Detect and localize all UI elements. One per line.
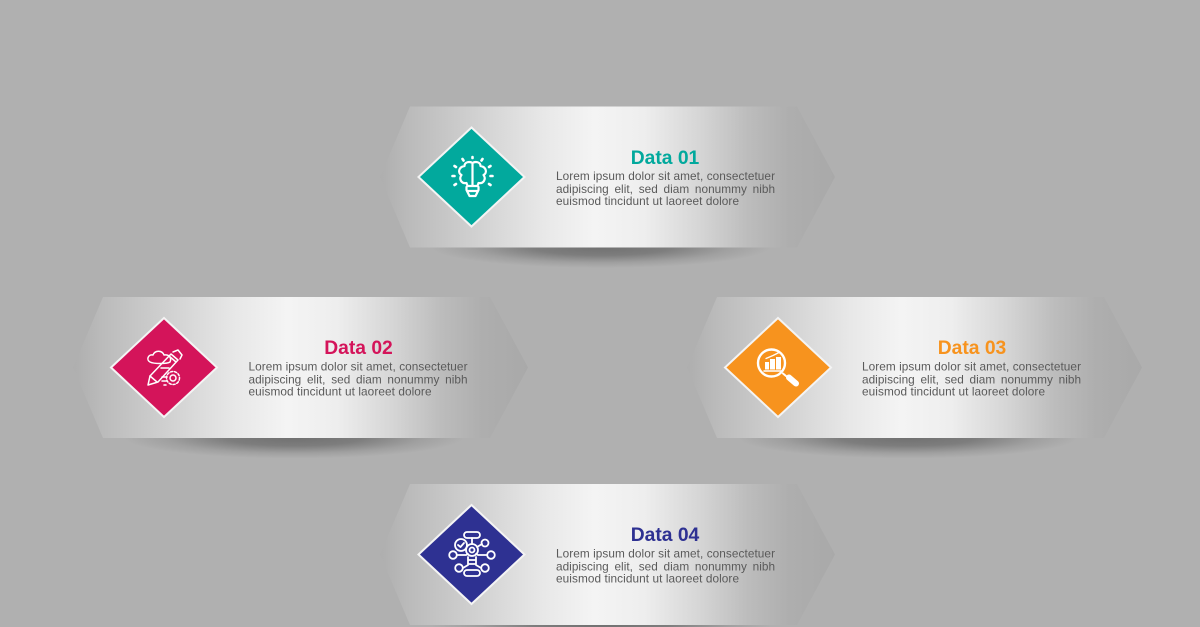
body text: Lorem ipsum dolor sit amet, consectetuer [862, 360, 1081, 374]
heading: Data 04 [631, 525, 700, 546]
body text [248, 360, 468, 398]
shadow [431, 604, 771, 627]
body text: adipiscing elit, sed diam nonummy nibh [556, 560, 775, 574]
body text: euismod tincidunt ut laoreet dolore [862, 384, 1045, 398]
body text: euismod tincidunt ut laoreet dolore [556, 572, 739, 586]
body text: euismod tincidunt ut laoreet dolore [556, 194, 739, 208]
icon: connected nodes mind map [449, 532, 495, 576]
icon: brain light bulb [452, 157, 492, 196]
diamond [418, 505, 524, 604]
diamond [418, 128, 524, 226]
diamond [725, 318, 831, 417]
panel: Data 03 [687, 297, 1142, 458]
panel: Data 04 [380, 484, 835, 627]
shadow [431, 226, 771, 268]
body text: adipiscing elit, sed diam nonummy nibh [556, 182, 775, 196]
arrow banner [380, 106, 835, 248]
body text [556, 169, 775, 208]
body text: Lorem ipsum dolor sit amet, consectetuer [556, 169, 775, 183]
body text [862, 360, 1081, 398]
arrow banner [380, 484, 835, 625]
body text: Lorem ipsum dolor sit amet, consectetuer [556, 546, 775, 560]
diamond [111, 318, 217, 417]
shadow [738, 416, 1078, 458]
body text: Lorem ipsum dolor sit amet, consectetuer [248, 360, 468, 374]
heading: Data 01 [631, 148, 700, 169]
heading: Data 03 [938, 338, 1007, 359]
panel: Data 01 [380, 106, 835, 268]
body text: euismod tincidunt ut laoreet dolore [248, 384, 432, 398]
shadow [124, 416, 464, 458]
panel: Data 02 [73, 297, 528, 458]
icon: cloud, pencil and gear [148, 350, 182, 385]
body text [556, 546, 775, 586]
heading: Data 02 [324, 338, 393, 359]
arrow banner [687, 297, 1142, 438]
body text: adipiscing elit, sed diam nonummy nibh [248, 372, 468, 386]
body text: adipiscing elit, sed diam nonummy nibh [862, 372, 1081, 386]
icon: magnifier with chart [758, 350, 796, 384]
arrow banner [73, 297, 528, 438]
